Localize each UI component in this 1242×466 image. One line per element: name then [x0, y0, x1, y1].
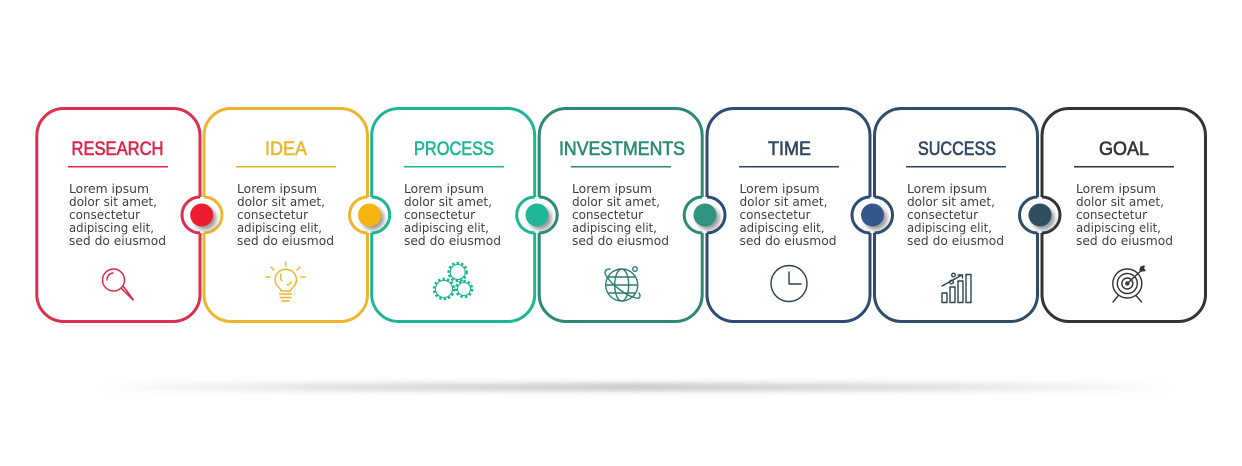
- text block: time: Lorem ipsum: [740, 182, 820, 196]
- text block: success: [907, 182, 1004, 248]
- text block: investments: [572, 182, 669, 248]
- text block: goal: adipiscing elit,: [1076, 221, 1161, 235]
- icon: gears: [434, 264, 472, 298]
- icon: bar chart: [942, 273, 971, 302]
- text block: idea: adipiscing elit,: [237, 221, 322, 235]
- panel: time: [707, 108, 870, 322]
- text block: success: dolor sit amet,: [907, 195, 995, 209]
- connector: research to idea: [182, 197, 222, 233]
- text block: investments: adipiscing elit,: [572, 221, 657, 235]
- text block: process: Lorem ipsum: [404, 182, 484, 196]
- panel: goal: [1042, 108, 1206, 322]
- text block: time: adipiscing elit,: [740, 221, 824, 235]
- heading: research: RESEARCH: [72, 139, 164, 160]
- text block: goal: sed do eiusmod: [1076, 234, 1173, 248]
- text block: success: Lorem ipsum: [907, 182, 987, 196]
- connector: time to success: [852, 197, 892, 233]
- panel: research: [37, 108, 200, 322]
- text block: research: Lorem ipsum: [69, 182, 149, 196]
- text block: investments: sed do eiusmod: [572, 234, 669, 248]
- text block: process: sed do eiusmod: [404, 234, 501, 248]
- connector: idea to process: [350, 197, 390, 233]
- heading: success: SUCCESS: [918, 139, 996, 160]
- text block: goal: dolor sit amet,: [1076, 195, 1164, 209]
- text block: success: sed do eiusmod: [907, 234, 1004, 248]
- icon: magnifier: [102, 269, 133, 300]
- panel: success: [874, 108, 1038, 322]
- text block: investments: dolor sit amet,: [572, 195, 660, 209]
- connector: success to goal: [1020, 197, 1060, 233]
- text block: time: consectetur: [740, 208, 811, 222]
- text block: process: consectetur: [404, 208, 475, 222]
- icon: globe: [605, 267, 640, 301]
- text block: idea: Lorem ipsum: [237, 182, 317, 196]
- text block: goal: [1076, 182, 1173, 248]
- panel: idea: [204, 108, 368, 322]
- connector: investments to time: [684, 197, 725, 233]
- text block: research: consectetur: [69, 208, 140, 222]
- text block: idea: dolor sit amet,: [237, 195, 325, 209]
- icon: clock: [771, 266, 807, 302]
- text block: investments: consectetur: [572, 208, 643, 222]
- text block: idea: consectetur: [237, 208, 308, 222]
- floor shadow: [95, 383, 1175, 391]
- text block: time: dolor sit amet,: [740, 195, 828, 209]
- text block: goal: Lorem ipsum: [1076, 182, 1156, 196]
- panel: investments: [539, 108, 702, 322]
- text block: research: dolor sit amet,: [69, 195, 157, 209]
- connector: process to investments: [517, 197, 557, 233]
- text block: process: dolor sit amet,: [404, 195, 492, 209]
- panel: process: [372, 108, 535, 322]
- text block: research: [69, 182, 166, 248]
- text block: process: [404, 182, 501, 248]
- heading: goal: GOAL: [1099, 139, 1149, 160]
- text block: time: sed do eiusmod: [740, 234, 836, 248]
- heading: process: PROCESS: [414, 139, 494, 160]
- icon: target: [1113, 266, 1145, 302]
- text block: success: consectetur: [907, 208, 978, 222]
- text block: process: adipiscing elit,: [404, 221, 489, 235]
- text block: research: adipiscing elit,: [69, 221, 154, 235]
- text block: investments: Lorem ipsum: [572, 182, 652, 196]
- heading: investments: INVESTMENTS: [559, 139, 685, 160]
- icon: light bulb: [266, 262, 305, 301]
- text block: time: [740, 182, 836, 248]
- heading: idea: IDEA: [265, 139, 307, 160]
- text block: research: sed do eiusmod: [69, 234, 166, 248]
- heading: time: TIME: [768, 139, 811, 160]
- text block: idea: [237, 182, 334, 248]
- text block: idea: sed do eiusmod: [237, 234, 334, 248]
- text block: goal: consectetur: [1076, 208, 1147, 222]
- text block: success: adipiscing elit,: [907, 221, 992, 235]
